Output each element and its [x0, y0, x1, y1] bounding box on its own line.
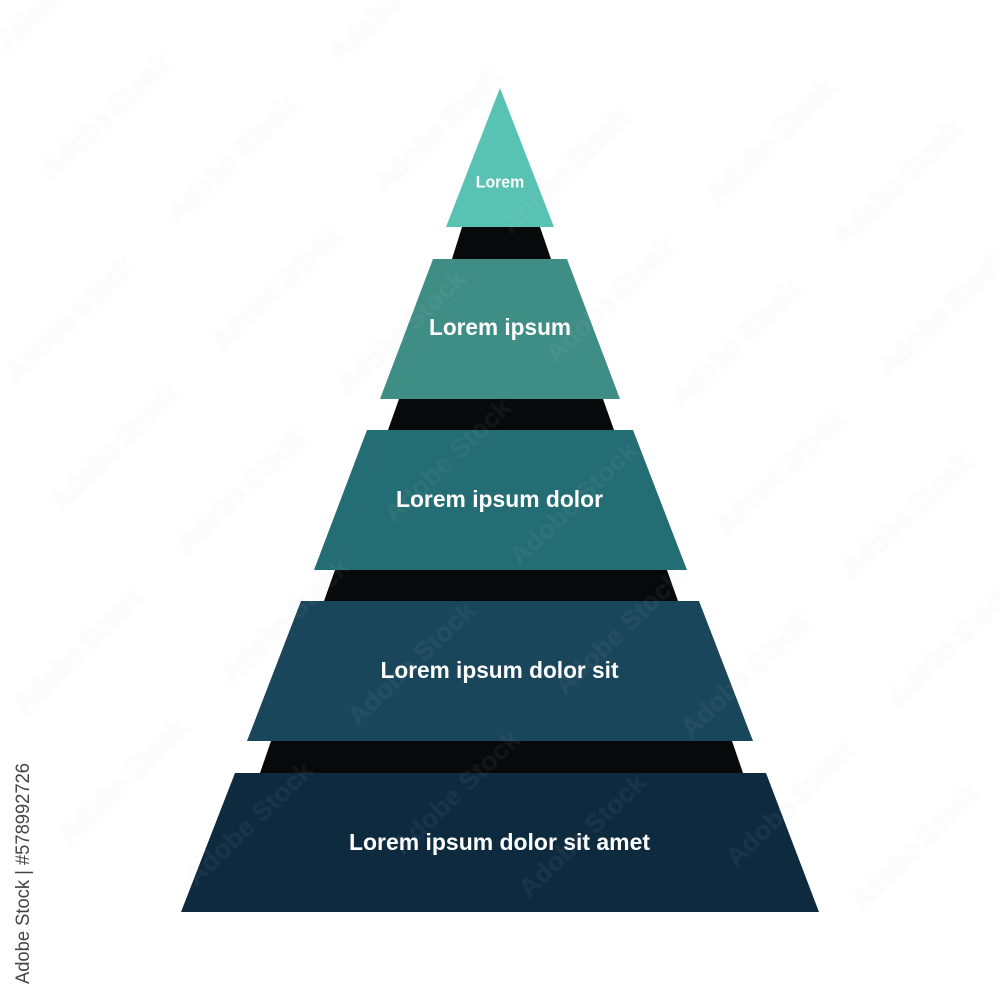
faint repeated watermark: Adobe Stock — [35, 48, 175, 184]
tier 2: Lorem ipsum — [429, 314, 571, 340]
black gap band 3 — [324, 570, 678, 601]
faint repeated watermark: Adobe Stock — [8, 583, 148, 719]
black gap band 1 — [452, 227, 551, 259]
tier 4: Lorem ipsum dolor sit — [380, 657, 619, 683]
faint repeated watermark: Adobe Stock — [836, 447, 976, 583]
faint repeated watermark: Adobe Stock — [503, 435, 643, 571]
faint repeated watermark: Adobe Stock — [827, 115, 967, 251]
faint repeated watermark: Adobe Stock — [170, 423, 310, 559]
tier 3 — [314, 430, 687, 570]
faint repeated watermark: Adobe Stock — [332, 263, 472, 399]
faint repeated watermark: Adobe Stock — [512, 767, 652, 903]
faint repeated watermark: Adobe Stock — [377, 392, 517, 528]
faint repeated watermark: Adobe Stock — [179, 755, 319, 891]
tier 3: Lorem ipsum dolor — [396, 486, 603, 512]
faint repeated watermark: Adobe Stock — [665, 275, 805, 411]
faint repeated watermark: Adobe Stock — [53, 712, 193, 848]
faint repeated watermark: Adobe Stock — [494, 103, 634, 239]
faint repeated watermark: Adobe Stock — [719, 736, 859, 872]
faint repeated watermark: Adobe Stock — [710, 404, 850, 540]
faint repeated watermark: Adobe Stock — [539, 232, 679, 368]
tier 1: apex — [446, 88, 554, 227]
black gap band 4 — [260, 741, 743, 773]
faint repeated watermark: Adobe Stock — [215, 552, 355, 688]
faint repeated watermark: Adobe Stock — [0, 251, 139, 387]
faint repeated watermark: Adobe Stock — [206, 220, 346, 356]
faint repeated watermark: Adobe Stock — [368, 60, 508, 196]
black gap band 2 — [388, 399, 614, 430]
faint repeated watermark: Adobe Stock — [341, 595, 481, 731]
tier 1: apex: Lorem — [476, 174, 524, 192]
faint repeated watermark: Adobe Stock — [701, 72, 841, 208]
tier 4 — [247, 601, 753, 741]
stock id side label: Adobe Stock | #578992726 — [13, 763, 34, 984]
faint repeated watermark: Adobe Stock — [548, 564, 688, 700]
faint repeated watermark: Adobe Stock — [44, 380, 184, 516]
faint repeated watermark: Adobe Stock — [161, 91, 301, 227]
tier 2 — [380, 259, 620, 399]
faint repeated watermark: Adobe Stock — [845, 779, 985, 915]
faint repeated watermark: Adobe Stock — [674, 607, 814, 743]
faint repeated watermark: Adobe Stock — [386, 724, 526, 860]
tier 5: base: Lorem ipsum dolor sit amet — [349, 829, 650, 855]
tier 5: base — [181, 773, 819, 912]
